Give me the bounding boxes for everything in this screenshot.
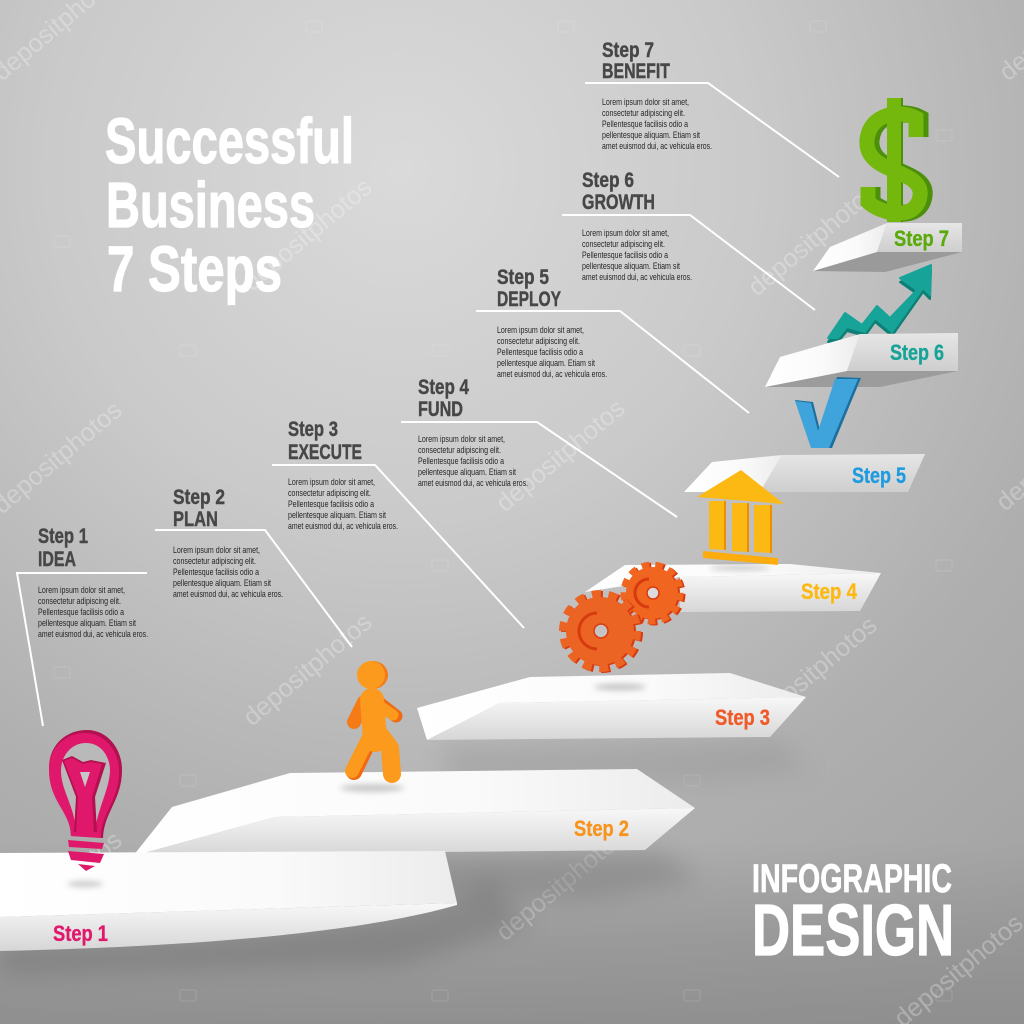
step 4 text block: amet euismod dui, ac vehicula eros. xyxy=(418,477,528,488)
step 7 text block: BENEFIT xyxy=(602,60,670,83)
step 3 text block: amet euismod dui, ac vehicula eros. xyxy=(288,520,398,531)
step 3 platform: Step 3 xyxy=(715,705,770,730)
step 2 text block: Step 2 xyxy=(173,486,225,509)
step 6 text block: pellentesque aliquam. Etiam sit xyxy=(582,260,680,271)
watermark: depositphotos xyxy=(491,394,631,518)
icon: bank building xyxy=(697,470,784,570)
step 4 text block: Lorem ipsum dolor sit amet, xyxy=(418,433,505,444)
step 3 text block xyxy=(272,418,524,628)
step 1 text block xyxy=(17,525,148,726)
step 5 platform: Step 5 xyxy=(852,463,906,488)
step 3 text block: pellentesque aliquam. Etiam sit xyxy=(288,509,386,520)
step 1 text block: Lorem ipsum dolor sit amet, xyxy=(38,584,125,595)
step 1 text block: Step 1 xyxy=(38,525,88,548)
step 2 text block: Lorem ipsum dolor sit amet, xyxy=(173,544,260,555)
title: Successful xyxy=(105,105,354,177)
icon: light bulb xyxy=(49,730,122,887)
step 5 text block: Step 5 xyxy=(497,266,549,289)
step 6 text block: consectetur adipiscing elit. xyxy=(582,238,665,249)
step 7 text block: pellentesque aliquam. Etiam sit xyxy=(602,129,700,140)
title xyxy=(105,105,354,305)
step 3 text block: Pellentesque facilisis odio a xyxy=(288,498,375,509)
step 2 text block: amet euismod dui, ac vehicula eros. xyxy=(173,588,283,599)
step 6 text block: GROWTH xyxy=(582,191,655,214)
step 7 text block: Lorem ipsum dolor sit amet, xyxy=(602,96,689,107)
step 7 platform: Step 7 xyxy=(894,226,949,251)
icon: gears xyxy=(563,565,682,690)
title: Business xyxy=(106,169,315,241)
step 2 text block: PLAN xyxy=(173,508,218,531)
step 3 text block: Step 3 xyxy=(288,418,338,441)
step 2 text block: Pellentesque facilisis odio a xyxy=(173,566,260,577)
step 4 text block: FUND xyxy=(418,398,463,421)
step 1 shadow xyxy=(0,880,530,975)
step 1 text block: amet euismod dui, ac vehicula eros. xyxy=(38,628,148,639)
step 5 text block xyxy=(476,266,749,413)
step 4 text block: Pellentesque facilisis odio a xyxy=(418,455,505,466)
infographic design wordmark xyxy=(752,857,954,971)
step 1 text block: IDEA xyxy=(38,548,76,571)
step 3 text block: Lorem ipsum dolor sit amet, xyxy=(288,476,375,487)
step 5 text block: consectetur adipiscing elit. xyxy=(497,335,580,346)
step 6 platform: Step 6 xyxy=(890,340,944,365)
icon: growth arrow xyxy=(828,265,931,342)
watermark: depositphotos xyxy=(491,823,631,947)
step 7 text block: consectetur adipiscing elit. xyxy=(602,107,685,118)
infographic design wordmark: DESIGN xyxy=(752,891,954,971)
step 5 platform xyxy=(684,454,925,492)
step 4 text block: consectetur adipiscing elit. xyxy=(418,444,501,455)
step 3 text block: EXECUTE xyxy=(288,441,362,464)
icon: dollar sign xyxy=(867,98,924,222)
step 1 platform xyxy=(0,851,457,951)
step 7 text block: amet euismod dui, ac vehicula eros. xyxy=(602,140,712,151)
step 5 text block: amet euismod dui, ac vehicula eros. xyxy=(497,368,607,379)
step 2 text block xyxy=(155,486,352,647)
step 7 text block: Pellentesque facilisis odio a xyxy=(602,118,689,129)
step 2 text block: pellentesque aliquam. Etiam sit xyxy=(173,577,271,588)
step 1 text block: consectetur adipiscing elit. xyxy=(38,595,121,606)
watermark: depositphotos xyxy=(743,611,883,735)
step 6 text block: Lorem ipsum dolor sit amet, xyxy=(582,227,669,238)
step 2 platform xyxy=(133,769,695,856)
title: 7 Steps xyxy=(107,233,282,305)
small gear xyxy=(624,565,682,622)
step 4 text block xyxy=(401,376,677,517)
step 6 text block: amet euismod dui, ac vehicula eros. xyxy=(582,271,692,282)
watermark: depositphotos xyxy=(743,178,883,302)
step 7 text block: Step 7 xyxy=(602,39,654,62)
step 4 platform: Step 4 xyxy=(801,579,858,604)
watermark: depositphotos xyxy=(238,608,378,732)
step 3 shadow xyxy=(440,740,810,785)
step 1 text block: pellentesque aliquam. Etiam sit xyxy=(38,617,136,628)
icon: check mark xyxy=(795,377,861,448)
step 2 platform: Step 2 xyxy=(574,816,629,841)
step 5 text block: Lorem ipsum dolor sit amet, xyxy=(497,324,584,335)
step 5 text block: pellentesque aliquam. Etiam sit xyxy=(497,357,595,368)
step 2 shadow xyxy=(150,852,700,900)
step 6 text block: Pellentesque facilisis odio a xyxy=(582,249,669,260)
step 6 text block: Step 6 xyxy=(582,169,634,192)
step 2 text block: consectetur adipiscing elit. xyxy=(173,555,256,566)
step 7 platform xyxy=(813,223,962,272)
step 6 text block xyxy=(562,169,815,310)
step 3 text block: consectetur adipiscing elit. xyxy=(288,487,371,498)
step 5 text block: Pellentesque facilisis odio a xyxy=(497,346,584,357)
step 6 platform xyxy=(765,333,958,387)
large gear xyxy=(563,594,639,669)
step 4 platform xyxy=(585,564,881,612)
step 4 text block: pellentesque aliquam. Etiam sit xyxy=(418,466,516,477)
icon: walking person xyxy=(340,661,404,792)
step 4 text block: Step 4 xyxy=(418,376,469,399)
step 5 text block: DEPLOY xyxy=(497,288,561,311)
watermark: depositphotos xyxy=(238,173,378,297)
step 7 text block xyxy=(585,39,839,177)
step 1 text block: Pellentesque facilisis odio a xyxy=(38,606,125,617)
infographic design wordmark: INFOGRAPHIC xyxy=(752,857,952,901)
step 3 platform xyxy=(417,673,806,740)
step 1 platform: Step 1 xyxy=(53,921,108,946)
